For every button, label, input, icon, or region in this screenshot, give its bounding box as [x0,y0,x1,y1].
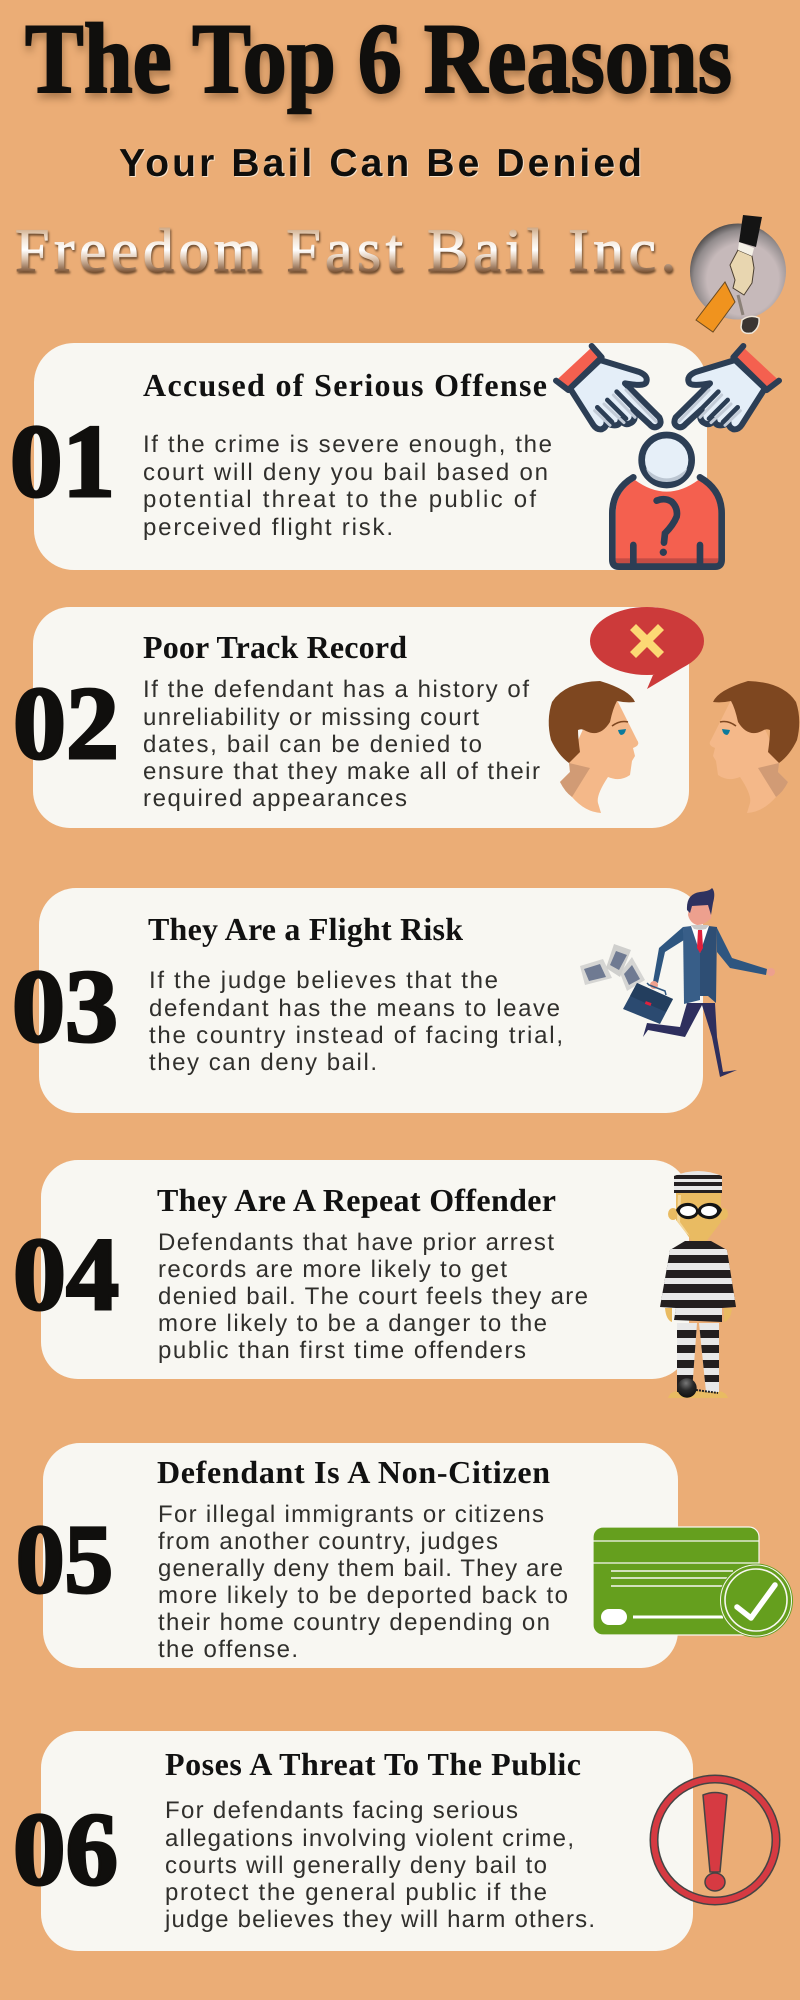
body text 02: dates, bail can be denied to [143,731,482,758]
number 04: 04 [13,1217,119,1332]
subtitle: Your Bail Can Be Denied [119,142,642,185]
body text 04 [158,1229,588,1364]
body text 05: the offense. [158,1636,298,1663]
body text 01: If the crime is severe enough, the [143,431,552,458]
icon: logo hand with key [690,215,786,333]
number 03: 03 [12,949,118,1064]
heading 02: Poor Track Record [143,629,407,665]
body text 06: protect the general public if the [165,1879,547,1906]
company name: Freedom Fast Bail Inc. [15,217,676,285]
body text 01: perceived flight risk. [143,514,393,541]
number 02: 02 [13,666,119,781]
body text 02: unreliability or missing court [143,704,479,731]
body text 04: records are more likely to get [158,1256,507,1283]
body text 06: courts will generally deny bail to [165,1852,547,1879]
body text 03 [149,967,563,1076]
body text 04: Defendants that have prior arrest [158,1229,554,1256]
panel: 06 threat to public [13,1731,776,1951]
body text 04: denied bail. The court feels they are [158,1283,588,1310]
body text 06: allegations involving violent crime, [165,1825,574,1852]
panel: 01 accused of serious offense [10,343,779,570]
panel: 03 flight risk [12,888,775,1113]
icon: exclamation warning [654,1779,776,1901]
icon: two heads with denied speech bubble [549,607,799,813]
body text 06: For defendants facing serious [165,1797,518,1824]
body text 05: from another country, judges [158,1528,498,1555]
number 06: 06 [13,1792,118,1907]
body text 01: potential threat to the public of [143,486,536,513]
body text 05 [158,1501,568,1663]
body text 04: public than first time offenders [158,1337,526,1364]
body text 05: For illegal immigrants or citizens [158,1501,544,1528]
panel: 04 repeat offender [13,1160,738,1398]
body text 02 [143,676,540,812]
icon: green card with check mark [593,1527,793,1638]
heading 01: Accused of Serious Offense [143,367,547,403]
body text 06: judge believes they will harm others. [164,1906,595,1933]
body text 03: they can deny bail. [149,1049,377,1076]
body text 01 [143,431,552,541]
heading 05: Defendant Is A Non-Citizen [157,1454,550,1490]
body text 02: If the defendant has a history of [143,676,529,703]
body text 05: their home country depending on [158,1609,550,1636]
number 05: 05 [16,1506,113,1614]
heading 06: Poses A Threat To The Public [165,1746,581,1782]
body text 06 [164,1797,595,1933]
body text 03: If the judge believes that the [149,967,498,994]
body text 02: ensure that they make all of their [143,758,540,785]
number 01: 01 [10,404,115,519]
body text 05: more likely to be deported back to [158,1582,568,1609]
body text 05: generally deny them bail. They are [158,1555,563,1582]
body text 03: the country instead of facing trial, [149,1022,563,1049]
heading 03: They Are a Flight Risk [148,911,463,948]
body text 01: court will deny you bail based on [143,459,548,486]
body text 02: required appearances [143,785,407,812]
heading 04: They Are A Repeat Offender [157,1182,556,1218]
icon: pointing hands and suspect [556,346,779,567]
body text 04: more likely to be a danger to the [158,1310,547,1337]
body text 03: defendant has the means to leave [149,995,560,1022]
icon: running man with briefcase [580,888,775,1077]
icon: prisoner with ball and chain [658,1168,738,1398]
panel: 05 non-citizen [16,1443,793,1668]
panel: 02 poor track record [13,607,799,828]
